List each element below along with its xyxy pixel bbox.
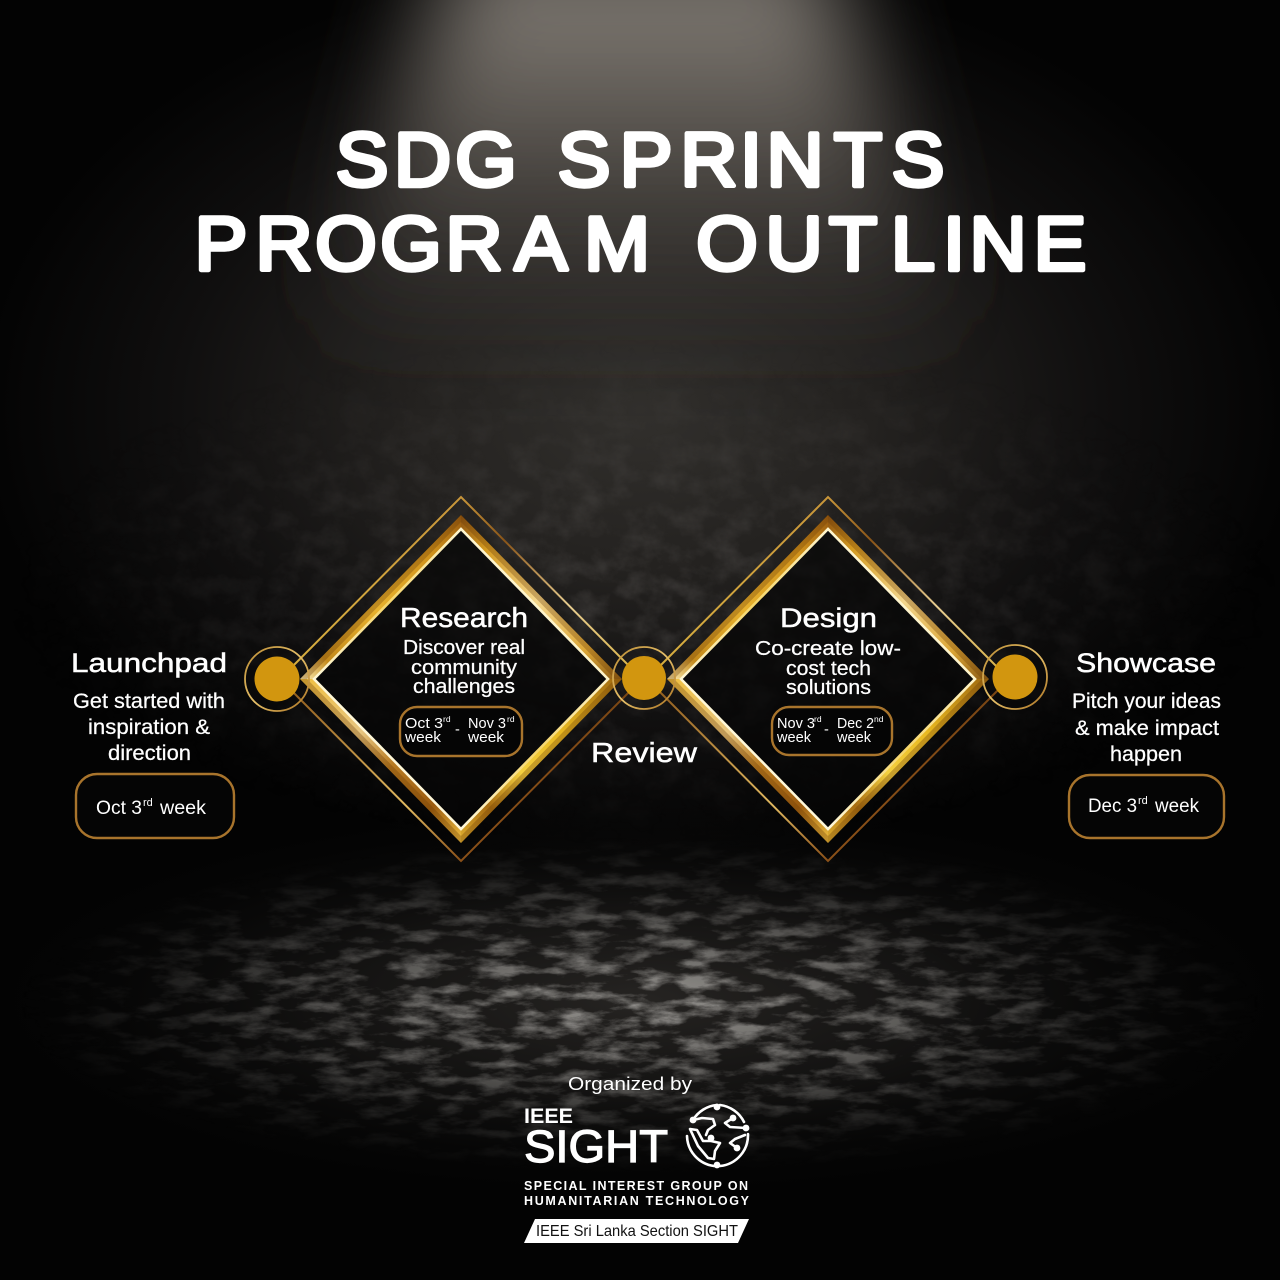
panel: research xyxy=(400,602,528,756)
banner: section name: IEEE Sri Lanka Section SIGHT xyxy=(536,1223,738,1240)
text: showcase description xyxy=(1072,690,1221,766)
date box: design: week xyxy=(836,730,872,746)
date box: launchpad: rd xyxy=(143,797,153,809)
date box: showcase: rd xyxy=(1138,795,1148,807)
text: showcase description: & make impact xyxy=(1075,717,1219,740)
panel: design xyxy=(755,603,901,755)
text: research description xyxy=(403,637,525,698)
date box: research: - xyxy=(455,722,460,738)
date box: research: week xyxy=(467,730,505,746)
diamond: design frame xyxy=(647,497,1009,861)
date box: research: week xyxy=(404,730,442,746)
logo wordmark: IEEE SIGHT: SIGHT xyxy=(524,1121,668,1172)
date box: design: week xyxy=(776,730,812,746)
text: launchpad description xyxy=(73,690,225,765)
date box: design: Nov 3 xyxy=(777,716,815,732)
text: design description: cost tech xyxy=(786,658,871,680)
icon: globe logo xyxy=(687,1104,749,1168)
date box: showcase: week xyxy=(1154,796,1199,817)
date box: research: rd xyxy=(507,714,515,724)
text: design description: Co-create low- xyxy=(755,638,901,660)
panel: showcase xyxy=(1069,648,1224,838)
logo wordmark: IEEE SIGHT: IEEE xyxy=(524,1105,573,1128)
date box: launchpad: week xyxy=(159,798,207,819)
text: launchpad description: Get started with xyxy=(73,690,225,713)
background: dark concrete room xyxy=(58,68,1228,1166)
date box: design: nd xyxy=(874,714,884,724)
title: PROGRAM OUTLINE xyxy=(195,202,1086,287)
text: launchpad description: direction xyxy=(108,742,191,765)
text: design description: solutions xyxy=(786,677,871,699)
heading: launchpad: Launchpad xyxy=(71,648,227,678)
heading: research: Research xyxy=(400,602,528,633)
panel: launchpad xyxy=(71,648,234,838)
date box: showcase xyxy=(1069,775,1224,838)
text: organized by: Organized by xyxy=(568,1074,692,1094)
date box: research: rd xyxy=(443,714,451,724)
text: showcase description: happen xyxy=(1110,743,1182,766)
text: showcase description: Pitch your ideas xyxy=(1072,690,1221,713)
date box: research: Oct 3 xyxy=(405,716,443,732)
date box: launchpad: Oct 3 xyxy=(96,798,142,819)
date box: design: rd xyxy=(814,714,822,724)
date box: launchpad xyxy=(76,774,234,838)
spotlight beam xyxy=(310,0,970,360)
title xyxy=(195,118,1086,287)
text: launchpad description: inspiration & xyxy=(88,716,210,739)
title: SDG SPRINTS xyxy=(336,118,944,203)
date box: design xyxy=(772,707,892,755)
heading: design: Design xyxy=(780,603,877,633)
date box: research xyxy=(400,707,522,756)
date box: design: - xyxy=(824,722,829,738)
heading: showcase: Showcase xyxy=(1076,648,1216,678)
text: research description: challenges xyxy=(413,676,515,698)
diamond: research frame xyxy=(280,497,642,861)
label: review: Review xyxy=(591,737,698,768)
text: research description: Discover real xyxy=(403,637,525,659)
node: showcase xyxy=(983,645,1047,709)
date box: showcase: Dec 3 xyxy=(1088,796,1137,817)
node: review xyxy=(613,647,675,709)
date box: research: Nov 3 xyxy=(468,716,506,732)
text: design description xyxy=(755,638,901,699)
text: special interest group xyxy=(524,1179,750,1208)
date box: design: Dec 2 xyxy=(837,716,874,732)
text: special interest group: HUMANITARIAN TECHNOLOGY xyxy=(524,1194,750,1208)
text: research description: community xyxy=(411,657,517,679)
banner: section name xyxy=(524,1219,749,1243)
organizer block xyxy=(524,1074,750,1243)
node: launchpad xyxy=(245,647,309,711)
text: special interest group: SPECIAL INTEREST GROUP ON xyxy=(524,1179,748,1193)
